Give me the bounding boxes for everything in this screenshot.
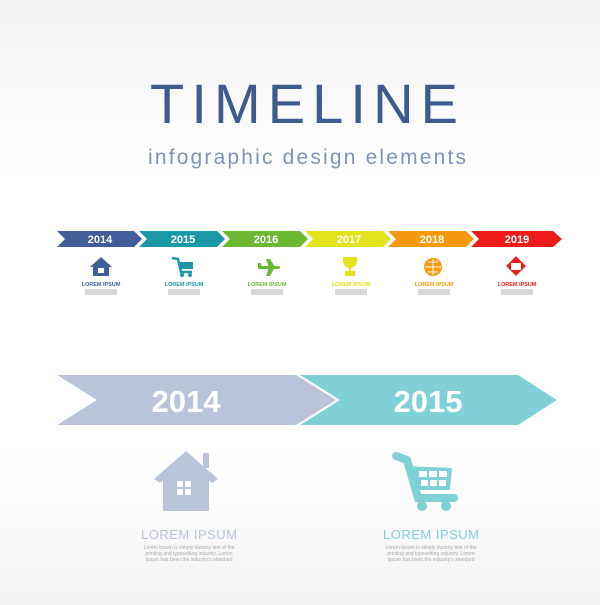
label 2015 xyxy=(383,527,479,563)
icon: big cart xyxy=(396,456,454,511)
label 2014: Lorem Ipsum is simply dummy text of the xyxy=(144,545,235,551)
arrow 2019: 2019 xyxy=(505,234,529,246)
icon: trophy small xyxy=(343,257,357,276)
label 2014: printing and typesetting industry. Lorem xyxy=(145,551,233,557)
label 2015: printing and typesetting industry. Lorem xyxy=(387,551,475,557)
icon: cart small xyxy=(172,258,193,277)
small timeline xyxy=(57,231,562,247)
big arrow 2014: 2014 xyxy=(152,384,221,419)
label 2015: LOREM IPSUM xyxy=(383,527,479,542)
small labels: LOREM IPSUM xyxy=(82,282,121,288)
small labels: LOREM IPSUM xyxy=(498,282,537,288)
icon: globe small xyxy=(424,258,442,276)
icon: mail small xyxy=(506,256,526,276)
label 2014: LOREM IPSUM xyxy=(141,527,237,542)
small labels xyxy=(82,282,537,288)
label 2014 xyxy=(141,527,237,563)
big arrow 2015 xyxy=(300,375,557,425)
icon: big house xyxy=(154,451,218,511)
arrow 2019 xyxy=(471,231,562,247)
arrow 2014: 2014 xyxy=(88,234,113,246)
arrow 2016: 2016 xyxy=(254,234,278,246)
small labels: LOREM IPSUM xyxy=(332,282,371,288)
arrow 2014 xyxy=(57,231,142,247)
label 2014: Ipsum has been the industry's standard xyxy=(145,557,233,563)
small labels: LOREM IPSUM xyxy=(165,282,204,288)
arrow 2017 xyxy=(305,231,391,247)
arrow 2015 xyxy=(139,231,225,247)
icon: house small xyxy=(90,257,112,276)
label 2015: Lorem Ipsum is simply dummy text of the xyxy=(386,545,477,551)
small body text lines xyxy=(85,290,533,294)
label 2015: Ipsum has been the industry's standard xyxy=(387,557,475,563)
small labels: LOREM IPSUM xyxy=(248,282,287,288)
small labels: LOREM IPSUM xyxy=(415,282,454,288)
big arrow 2014 xyxy=(57,375,336,425)
big arrow 2015: 2015 xyxy=(394,384,462,419)
title: TIMELINE xyxy=(150,72,462,135)
subtitle: infographic design elements xyxy=(148,146,466,169)
arrow 2016 xyxy=(222,231,308,247)
icon: plane small xyxy=(258,259,280,276)
arrow 2018 xyxy=(388,231,474,247)
arrow 2018: 2018 xyxy=(420,234,444,246)
arrow 2017: 2017 xyxy=(337,234,361,246)
arrow 2015: 2015 xyxy=(171,234,195,246)
